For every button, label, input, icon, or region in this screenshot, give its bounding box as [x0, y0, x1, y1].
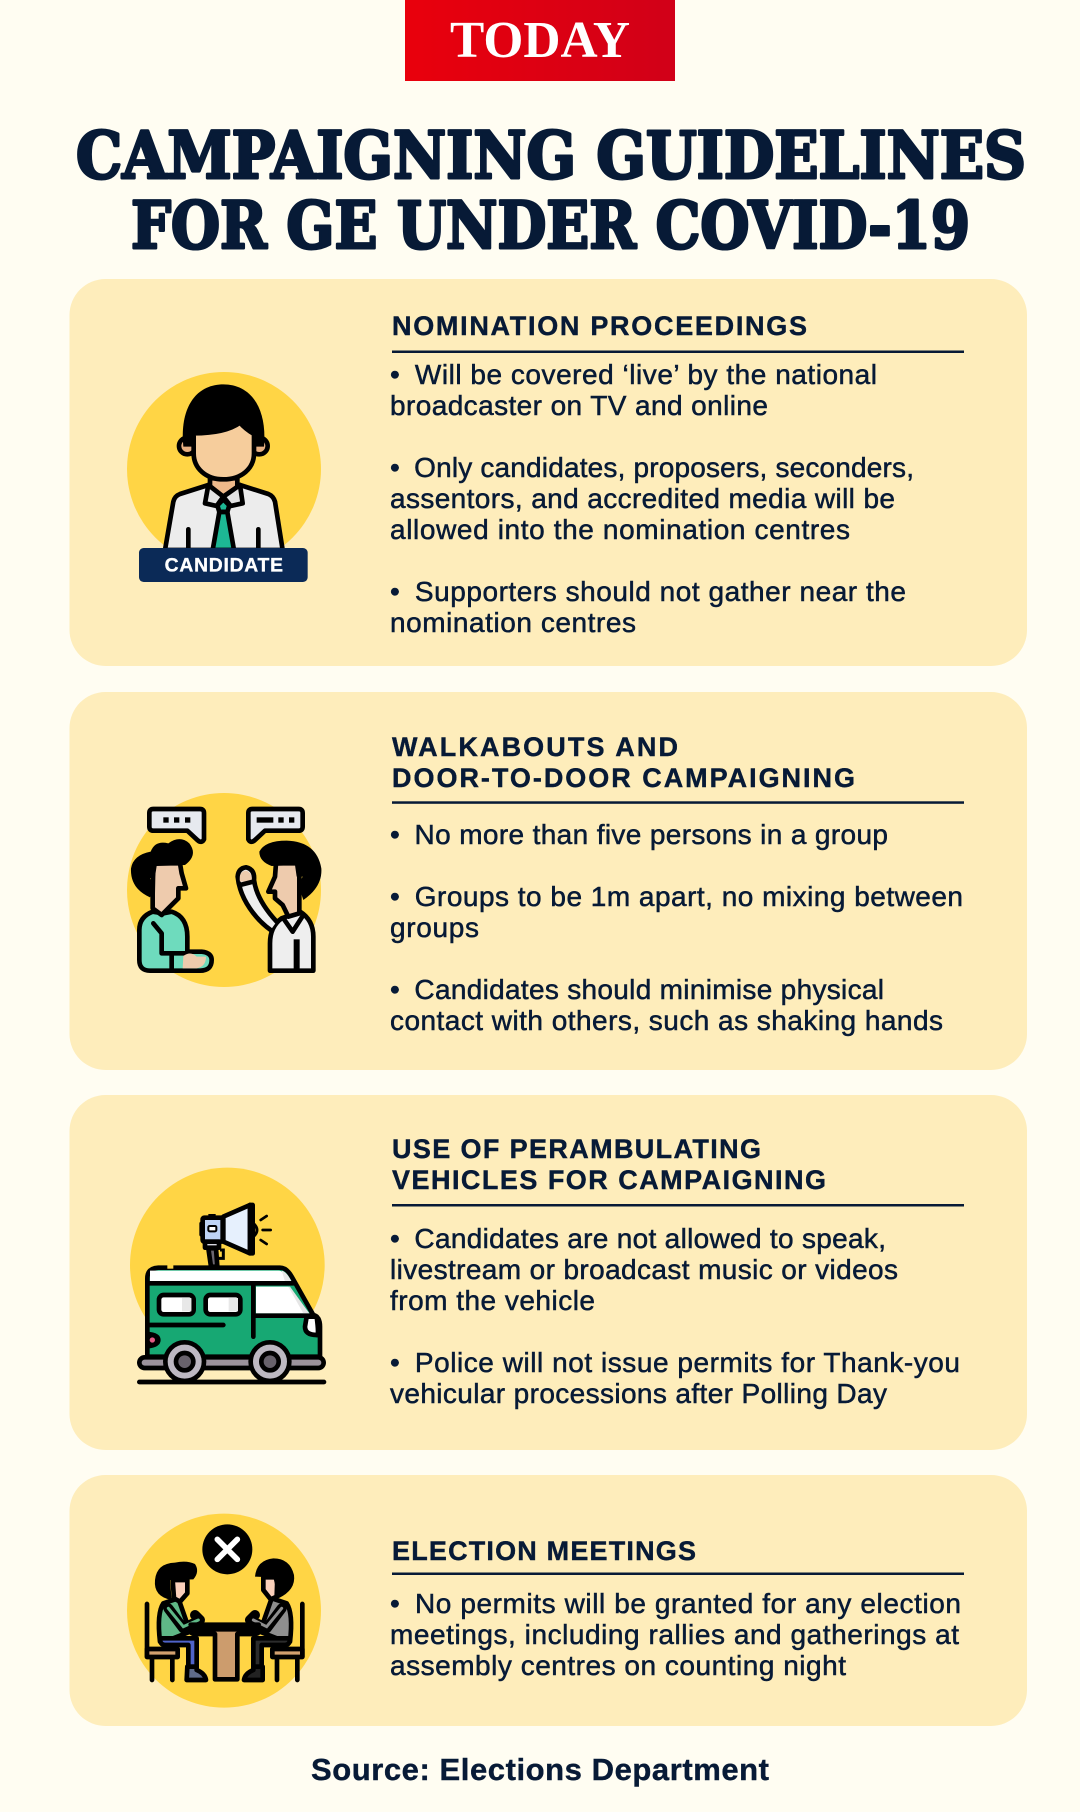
- icon: two people talking: [127, 793, 321, 987]
- heading: VEHICLES FOR CAMPAIGNING: [392, 1165, 826, 1195]
- icon: candidate: [127, 372, 321, 582]
- heading: USE OF PERAMBULATING: [392, 1134, 761, 1164]
- bullet text: [390, 1223, 960, 1409]
- bullet text: vehicular processions after Polling Day: [390, 1378, 887, 1409]
- panel: nomination proceedings: [70, 279, 1027, 666]
- heading: ELECTION MEETINGS: [392, 1536, 696, 1566]
- icon: van with loudspeaker: [130, 1168, 325, 1382]
- bullet text: [390, 1588, 961, 1681]
- bullet text: allowed into the nomination centres: [390, 514, 850, 545]
- bullet text: groups: [390, 912, 479, 943]
- heading: DOOR-TO-DOOR CAMPAIGNING: [392, 763, 855, 793]
- source line: Source: Elections Department: [311, 1752, 769, 1787]
- bullet text: assembly centres on counting night: [390, 1650, 846, 1681]
- heading: NOMINATION PROCEEDINGS: [392, 311, 807, 341]
- panel: election meetings: [70, 1475, 1027, 1726]
- bullet text: • No more than five persons in a group: [390, 819, 888, 850]
- heading: [392, 1134, 826, 1195]
- bullet text: • Candidates are not allowed to speak,: [390, 1223, 886, 1254]
- panel: perambulating vehicles: [70, 1095, 1027, 1450]
- title: FOR GE UNDER COVID-19: [131, 188, 970, 264]
- bullet text: [390, 819, 963, 1036]
- bullet text: broadcaster on TV and online: [390, 390, 768, 421]
- bullet text: nomination centres: [390, 607, 636, 638]
- bullet text: livestream or broadcast music or videos: [390, 1254, 898, 1285]
- bullet text: • Supporters should not gather near the: [390, 576, 906, 607]
- bullet text: assentors, and accredited media will be: [390, 483, 895, 514]
- bullet text: • Only candidates, proposers, seconders,: [390, 452, 914, 483]
- bullet text: meetings, including rallies and gatherings at: [390, 1619, 959, 1650]
- panel: walkabouts: [70, 692, 1027, 1070]
- bullet text: • Will be covered ‘live’ by the national: [390, 359, 877, 390]
- bullet text: • Groups to be 1m apart, no mixing between: [390, 881, 963, 912]
- bullet text: from the vehicle: [390, 1285, 595, 1316]
- bullet text: [390, 359, 914, 638]
- logo: TODAY: [405, 0, 675, 81]
- bullet text: • No permits will be granted for any election: [390, 1588, 961, 1619]
- bullet text: • Police will not issue permits for Thank-you: [390, 1347, 960, 1378]
- heading: [392, 732, 855, 793]
- icon: two people at a table with cross: [127, 1514, 321, 1708]
- icon: candidate: CANDIDATE: [165, 555, 283, 576]
- bullet text: • Candidates should minimise physical: [390, 974, 884, 1005]
- logo: TODAY: TODAY: [450, 12, 630, 69]
- title: [76, 118, 1026, 264]
- bullet text: contact with others, such as shaking hands: [390, 1005, 943, 1036]
- heading: WALKABOUTS AND: [392, 732, 678, 762]
